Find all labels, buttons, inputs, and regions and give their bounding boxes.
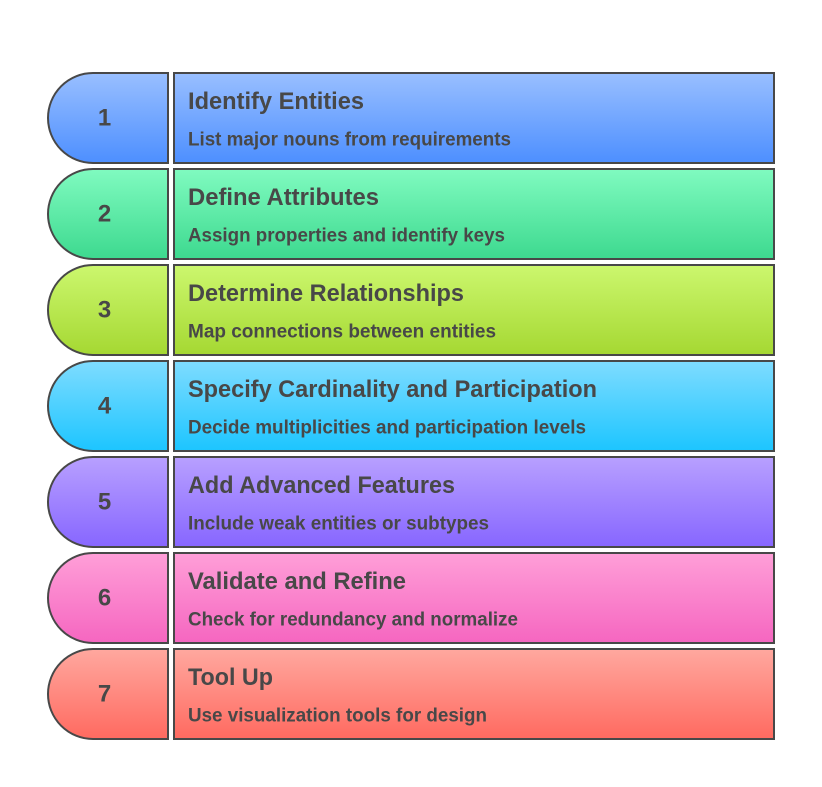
step 3 number tab	[48, 265, 168, 355]
step 5 number tab	[48, 457, 168, 547]
step 2 content panel: Assign properties and identify keys	[188, 224, 505, 246]
step 5 number tab: 5	[98, 488, 111, 516]
step 1 number tab	[48, 73, 168, 163]
step 7 content panel: Tool Up	[188, 664, 273, 691]
step 2 content panel	[174, 169, 774, 259]
step 1	[48, 73, 774, 163]
step 3 content panel: Determine Relationships	[188, 280, 464, 307]
step 3 number tab: 3	[98, 296, 111, 324]
step 1 number tab: 1	[98, 104, 111, 132]
step 3 content panel	[174, 265, 774, 355]
step 4 number tab	[48, 361, 168, 451]
step 7 content panel: Use visualization tools for design	[188, 704, 487, 726]
step 2 number tab	[48, 169, 168, 259]
step 6 content panel: Check for redundancy and normalize	[188, 608, 518, 630]
step 5 content panel	[174, 457, 774, 547]
step 5	[48, 457, 774, 547]
step 2 number tab: 2	[98, 200, 111, 228]
step 6 number tab	[48, 553, 168, 643]
step 3 content panel: Map connections between entities	[188, 320, 496, 342]
step 6	[48, 553, 774, 643]
step 5 content panel: Include weak entities or subtypes	[188, 512, 489, 534]
step 4	[48, 361, 774, 451]
step 1 content panel: List major nouns from requirements	[188, 128, 511, 150]
step 4 content panel	[174, 361, 774, 451]
step 1 content panel	[174, 73, 774, 163]
step 2	[48, 169, 774, 259]
step 7 number tab	[48, 649, 168, 739]
step 1 content panel: Identify Entities	[188, 88, 364, 115]
step 6 content panel	[174, 553, 774, 643]
step 6 number tab: 6	[98, 584, 111, 612]
step 6 content panel: Validate and Refine	[188, 568, 406, 595]
step 2 content panel: Define Attributes	[188, 184, 379, 211]
step 7	[48, 649, 774, 739]
step 7 content panel	[174, 649, 774, 739]
step 5 content panel: Add Advanced Features	[188, 472, 455, 499]
step 7 number tab: 7	[98, 680, 111, 708]
step 4 number tab: 4	[98, 392, 112, 420]
step 4 content panel: Decide multiplicities and participation levels	[188, 416, 586, 438]
step 3	[48, 265, 774, 355]
step 4 content panel: Specify Cardinality and Participation	[188, 376, 597, 403]
